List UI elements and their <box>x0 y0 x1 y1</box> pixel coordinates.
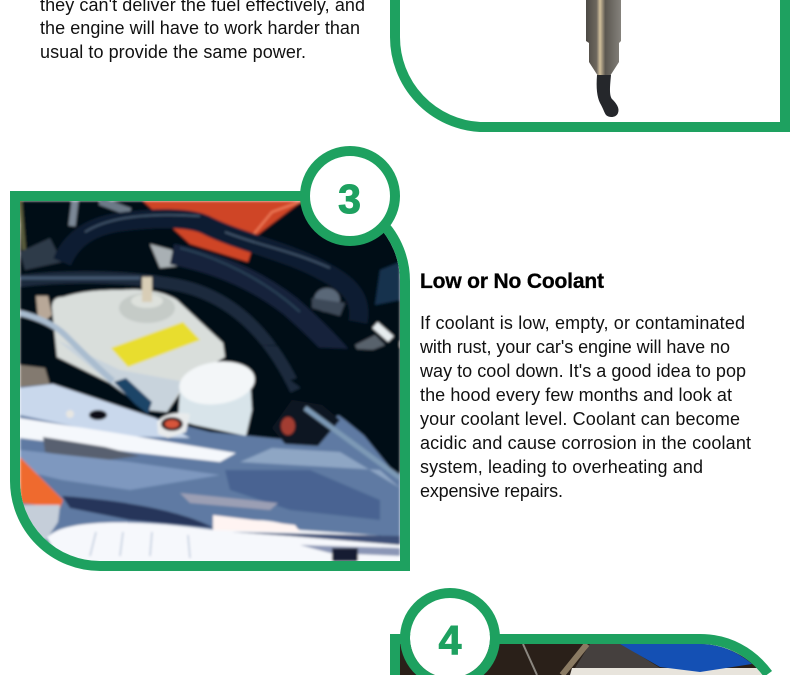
heading: Low or No Coolant: Low or No Coolant <box>420 270 604 293</box>
text block: previous section ending: the engine will have to work harder than <box>40 18 360 38</box>
text block: coolant explanation: the hood every few months and look at <box>420 385 732 405</box>
icon: fuel injector <box>586 0 621 117</box>
number badge 3 <box>305 151 395 241</box>
number badge 4: 4 <box>439 617 462 663</box>
text block: coolant explanation: your coolant level. Coolant can become <box>420 409 740 429</box>
photo: mechanic under car <box>400 644 763 675</box>
text block: previous section ending <box>40 0 365 62</box>
panel: fuel injector photo frame <box>395 0 785 127</box>
panel: next section photo frame <box>395 588 768 675</box>
number badge 4 <box>400 588 500 675</box>
text block: coolant explanation: If coolant is low, empty, or contaminated <box>420 313 745 333</box>
text block: coolant explanation: way to cool down. It's a good idea to pop <box>419 361 746 381</box>
number badge 3: 3 <box>338 176 361 222</box>
text block: coolant explanation: acidic and cause corrosion in the coolant <box>420 433 751 453</box>
text block: coolant explanation: system, leading to overheating and <box>420 457 703 477</box>
photo: engine bay with coolant reservoir <box>20 200 400 561</box>
text block: coolant explanation: with rust, your car's engine will have no <box>419 337 730 357</box>
text block: previous section ending: usual to provide the same power. <box>40 42 306 62</box>
text block: coolant explanation <box>419 313 751 501</box>
text block: coolant explanation: expensive repairs. <box>420 481 563 501</box>
panel: coolant engine photo frame <box>15 151 405 566</box>
